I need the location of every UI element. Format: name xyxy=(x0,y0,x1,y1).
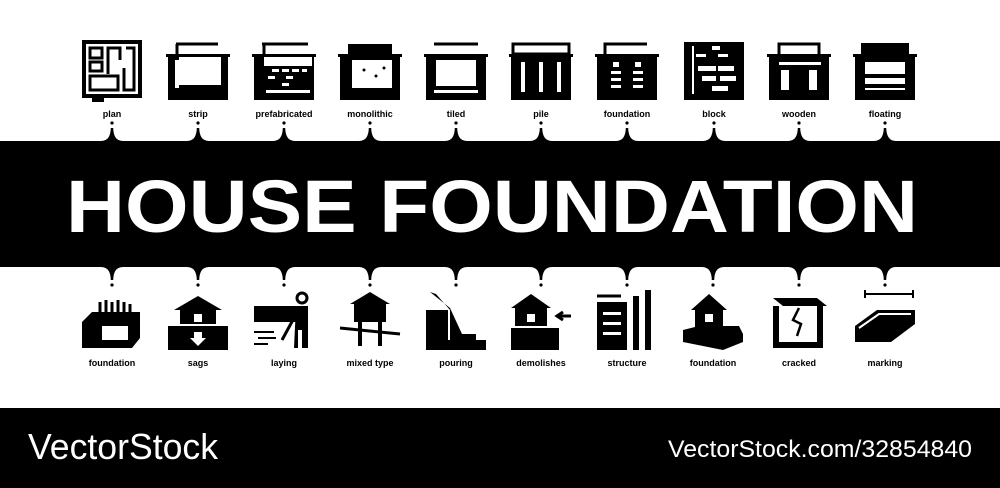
icon: demolishes xyxy=(511,294,571,350)
top labels: wooden xyxy=(781,109,816,119)
footer bar xyxy=(0,408,1000,488)
top labels: pile xyxy=(533,109,549,119)
top labels: floating xyxy=(869,109,901,119)
icon: floating xyxy=(853,43,917,100)
bottom labels xyxy=(89,358,903,368)
bottom connectors xyxy=(101,266,896,287)
icon: mixed type xyxy=(340,292,400,346)
icon: prefabricated xyxy=(252,44,316,100)
bottom labels: structure xyxy=(607,358,647,368)
footer brand: VectorStock xyxy=(28,426,219,467)
top labels: strip xyxy=(188,109,208,119)
bottom labels: laying xyxy=(271,358,297,368)
top labels: prefabricated xyxy=(255,109,313,119)
footer url: VectorStock.com/32854840 xyxy=(668,436,972,463)
bottom labels: foundation xyxy=(89,358,135,368)
icon: sags xyxy=(168,296,228,350)
icon: wooden xyxy=(767,44,831,100)
icon: plan xyxy=(84,42,140,102)
icon: strip xyxy=(166,44,230,100)
top labels: block xyxy=(702,109,727,119)
title band xyxy=(0,141,1000,267)
icon: laying xyxy=(254,293,308,348)
icon: cracked xyxy=(773,298,827,348)
icon: foundation (bottom) xyxy=(82,300,140,348)
top labels xyxy=(103,109,901,119)
top labels: plan xyxy=(103,109,121,119)
icon: structure xyxy=(597,290,651,350)
icon: block xyxy=(684,42,744,100)
icon: foundation (house) xyxy=(683,294,743,350)
top labels: foundation xyxy=(604,109,650,119)
icon: pouring xyxy=(426,292,486,350)
bottom labels: cracked xyxy=(782,358,816,368)
title: HOUSE FOUNDATION xyxy=(66,165,918,248)
icon: tiled xyxy=(424,44,488,100)
bottom labels: mixed type xyxy=(346,358,394,368)
bottom labels: sags xyxy=(188,358,208,368)
bottom labels: marking xyxy=(867,358,903,368)
top connectors xyxy=(101,121,896,142)
icon: foundation top xyxy=(595,44,659,100)
icon: monolithic xyxy=(338,44,402,100)
top labels: monolithic xyxy=(347,109,393,119)
bottom labels: foundation xyxy=(690,358,736,368)
top labels: tiled xyxy=(447,109,465,119)
bottom labels: pouring xyxy=(439,358,473,368)
icon: marking xyxy=(855,290,915,342)
icon: pile xyxy=(509,44,573,100)
bottom labels: demolishes xyxy=(516,358,566,368)
